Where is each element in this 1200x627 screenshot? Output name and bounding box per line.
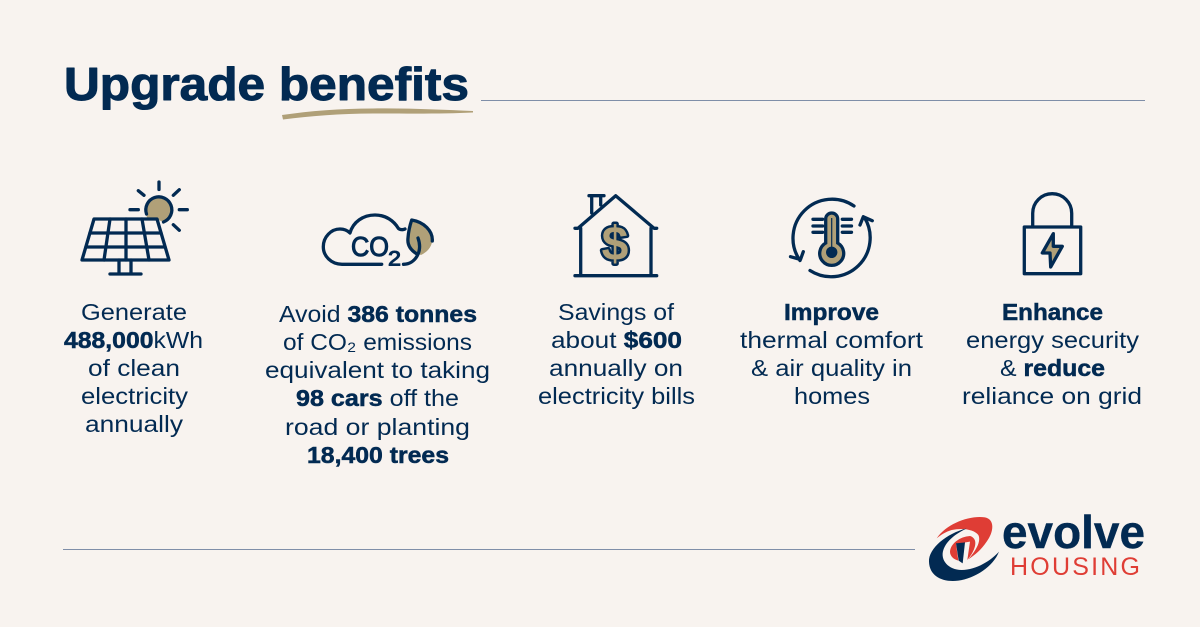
title brush underline	[282, 108, 473, 120]
text: generate electricity: electricity	[81, 383, 189, 409]
icon: solar panel and sun	[82, 182, 187, 274]
icon: thermometer with circular arrows	[790, 199, 872, 277]
panel: avoided emissions	[265, 215, 490, 468]
icon: CO2 cloud and leaf	[323, 215, 432, 270]
panel: clean electricity	[64, 182, 203, 437]
text: avoided emissions: of CO₂ emissions	[283, 329, 472, 355]
text: generate electricity: Generate	[81, 299, 187, 325]
text: generate electricity	[64, 299, 203, 437]
text: savings	[538, 299, 695, 409]
text: generate electricity: of clean	[88, 355, 180, 381]
text: savings: electricity bills	[538, 383, 695, 409]
text: energy security: Enhance	[1002, 299, 1103, 325]
logo subtitle: HOUSING	[1010, 553, 1140, 581]
icon: house with dollar sign: $	[602, 218, 629, 271]
title: Upgrade benefits	[64, 58, 469, 110]
icon: padlock with lightning bolt	[1024, 194, 1081, 274]
panel: bill savings	[538, 196, 695, 409]
logo swirl mark	[929, 517, 999, 581]
text: savings: Savings of	[558, 299, 675, 325]
icon: CO2 cloud and leaf: 2	[388, 248, 401, 270]
logo: Evolve Housing	[929, 506, 1145, 581]
text: thermal comfort	[740, 299, 924, 409]
panel: thermal comfort	[740, 199, 924, 409]
panel: energy security	[962, 194, 1142, 409]
text: avoided emissions: road or planting	[285, 414, 470, 440]
text: energy security: reliance on grid	[962, 383, 1142, 409]
text: avoided emissions: 18,400 trees	[307, 442, 449, 468]
text: avoided emissions: equivalent to taking	[265, 357, 490, 383]
text: savings: about $600	[551, 327, 682, 353]
text: energy security: energy security	[966, 327, 1140, 353]
icon: house with dollar sign	[575, 196, 657, 276]
text: generate electricity: annually	[85, 411, 184, 437]
text: savings: annually on	[549, 355, 683, 381]
logo wordmark: evolve	[1002, 506, 1145, 558]
text: avoided emissions: Avoid 386 tonnes	[279, 301, 477, 327]
text: generate electricity: 488,000 kWh	[64, 327, 203, 353]
text: thermal comfort: thermal comfort	[740, 327, 924, 353]
text: avoided emissions	[265, 301, 490, 468]
text: thermal comfort: & air quality in	[751, 355, 912, 381]
text: energy security	[962, 299, 1142, 409]
text: energy security: & reduce	[1000, 355, 1105, 381]
text: thermal comfort: Improve	[784, 299, 879, 325]
icon: CO2 cloud and leaf: CO	[351, 231, 389, 262]
text: avoided emissions: 98 cars off the	[296, 385, 459, 411]
text: thermal comfort: homes	[794, 383, 870, 409]
